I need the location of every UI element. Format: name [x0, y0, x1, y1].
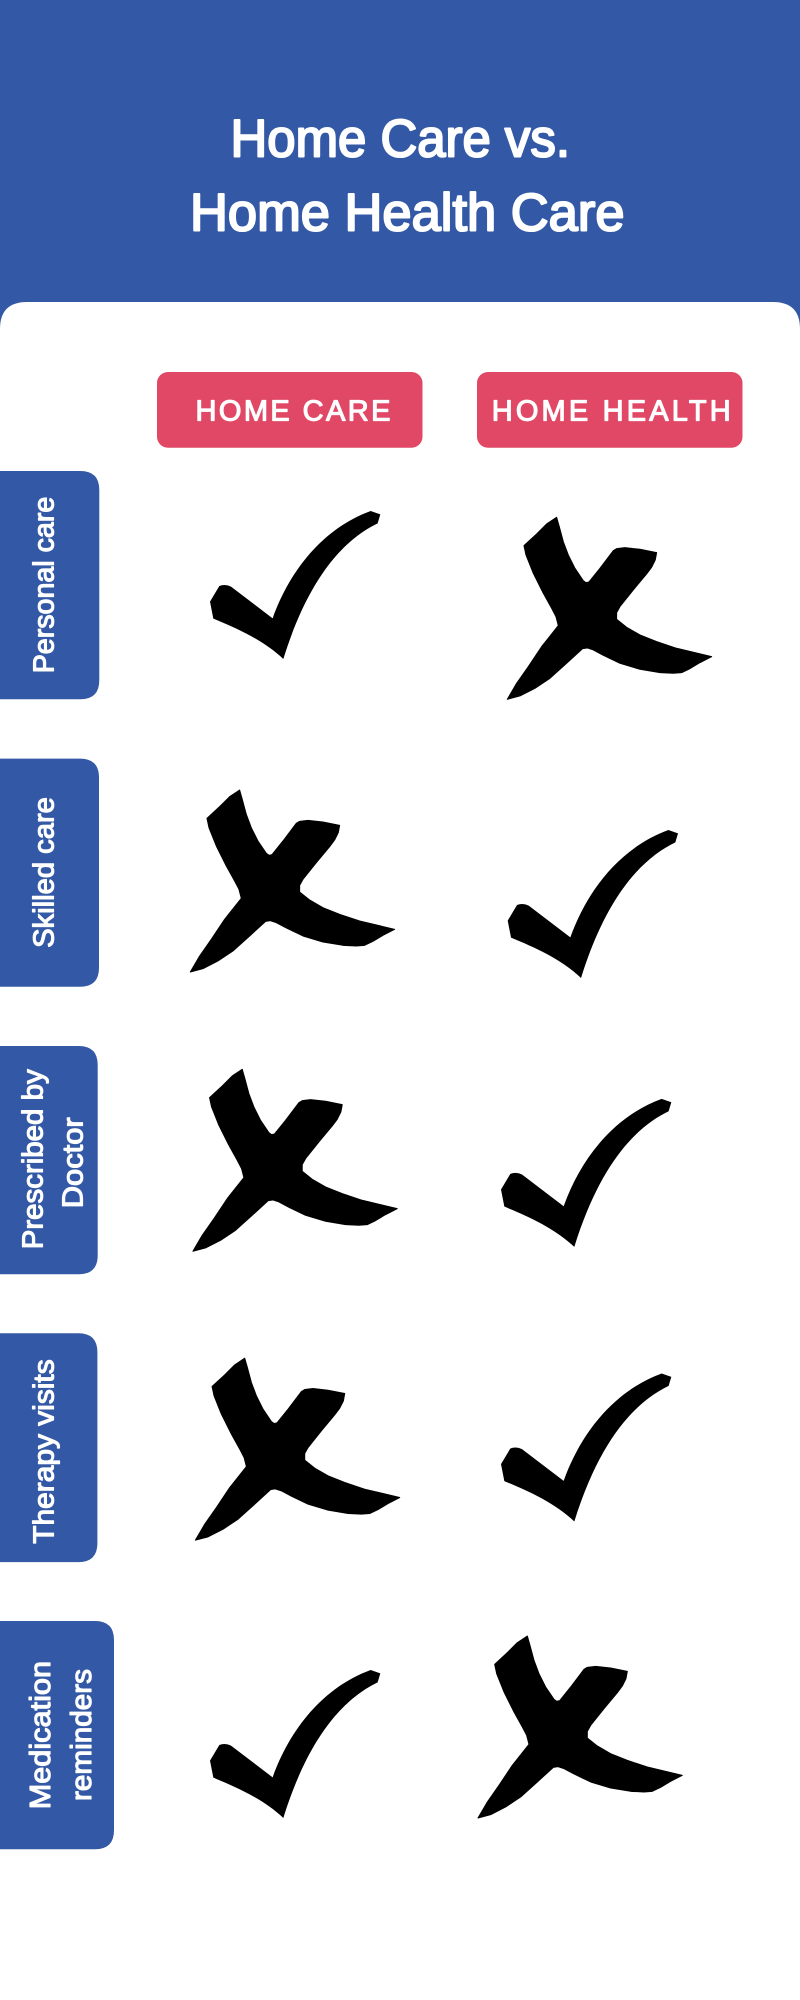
icon: check, therapy / home health [501, 1374, 671, 1521]
icon: cross, personal care / home health [507, 517, 712, 699]
row label: prescribed by doctor: Prescribed by [17, 1069, 49, 1249]
title: Home Health Care [190, 184, 624, 243]
icon: cross, skilled care / home care [190, 790, 395, 972]
icon: cross, therapy / home care [195, 1358, 400, 1540]
icon: check, skilled care / home health [508, 830, 678, 978]
column header: home health [477, 372, 742, 448]
icon: check, medication / home care [210, 1670, 380, 1818]
row label: skilled care: Skilled care [29, 797, 61, 948]
title: Home Care vs. [230, 110, 570, 169]
row label: medication reminders [0, 1621, 114, 1849]
row label: prescribed by doctor [0, 1046, 98, 1274]
row label: skilled care [0, 759, 99, 987]
icon: check, prescribed / home health [501, 1099, 671, 1247]
column header: home care: HOME CARE [196, 396, 390, 428]
row label: therapy visits [0, 1333, 97, 1562]
row label: prescribed by doctor: Doctor [57, 1117, 89, 1208]
row label: medication reminders: Medication [25, 1661, 57, 1809]
row label: medication reminders: reminders [66, 1669, 98, 1801]
icon: check, personal care / home care [210, 511, 380, 659]
row label: personal care [0, 471, 99, 699]
header band [0, 0, 800, 340]
column header: home care [157, 372, 422, 448]
row label: therapy visits: Therapy visits [29, 1359, 61, 1544]
title [190, 110, 624, 243]
icon: cross, prescribed / home care [193, 1069, 397, 1251]
column header: home health: HOME HEALTH [492, 396, 731, 428]
row label: personal care: Personal care [28, 497, 60, 673]
icon: cross, medication / home health [478, 1636, 682, 1818]
